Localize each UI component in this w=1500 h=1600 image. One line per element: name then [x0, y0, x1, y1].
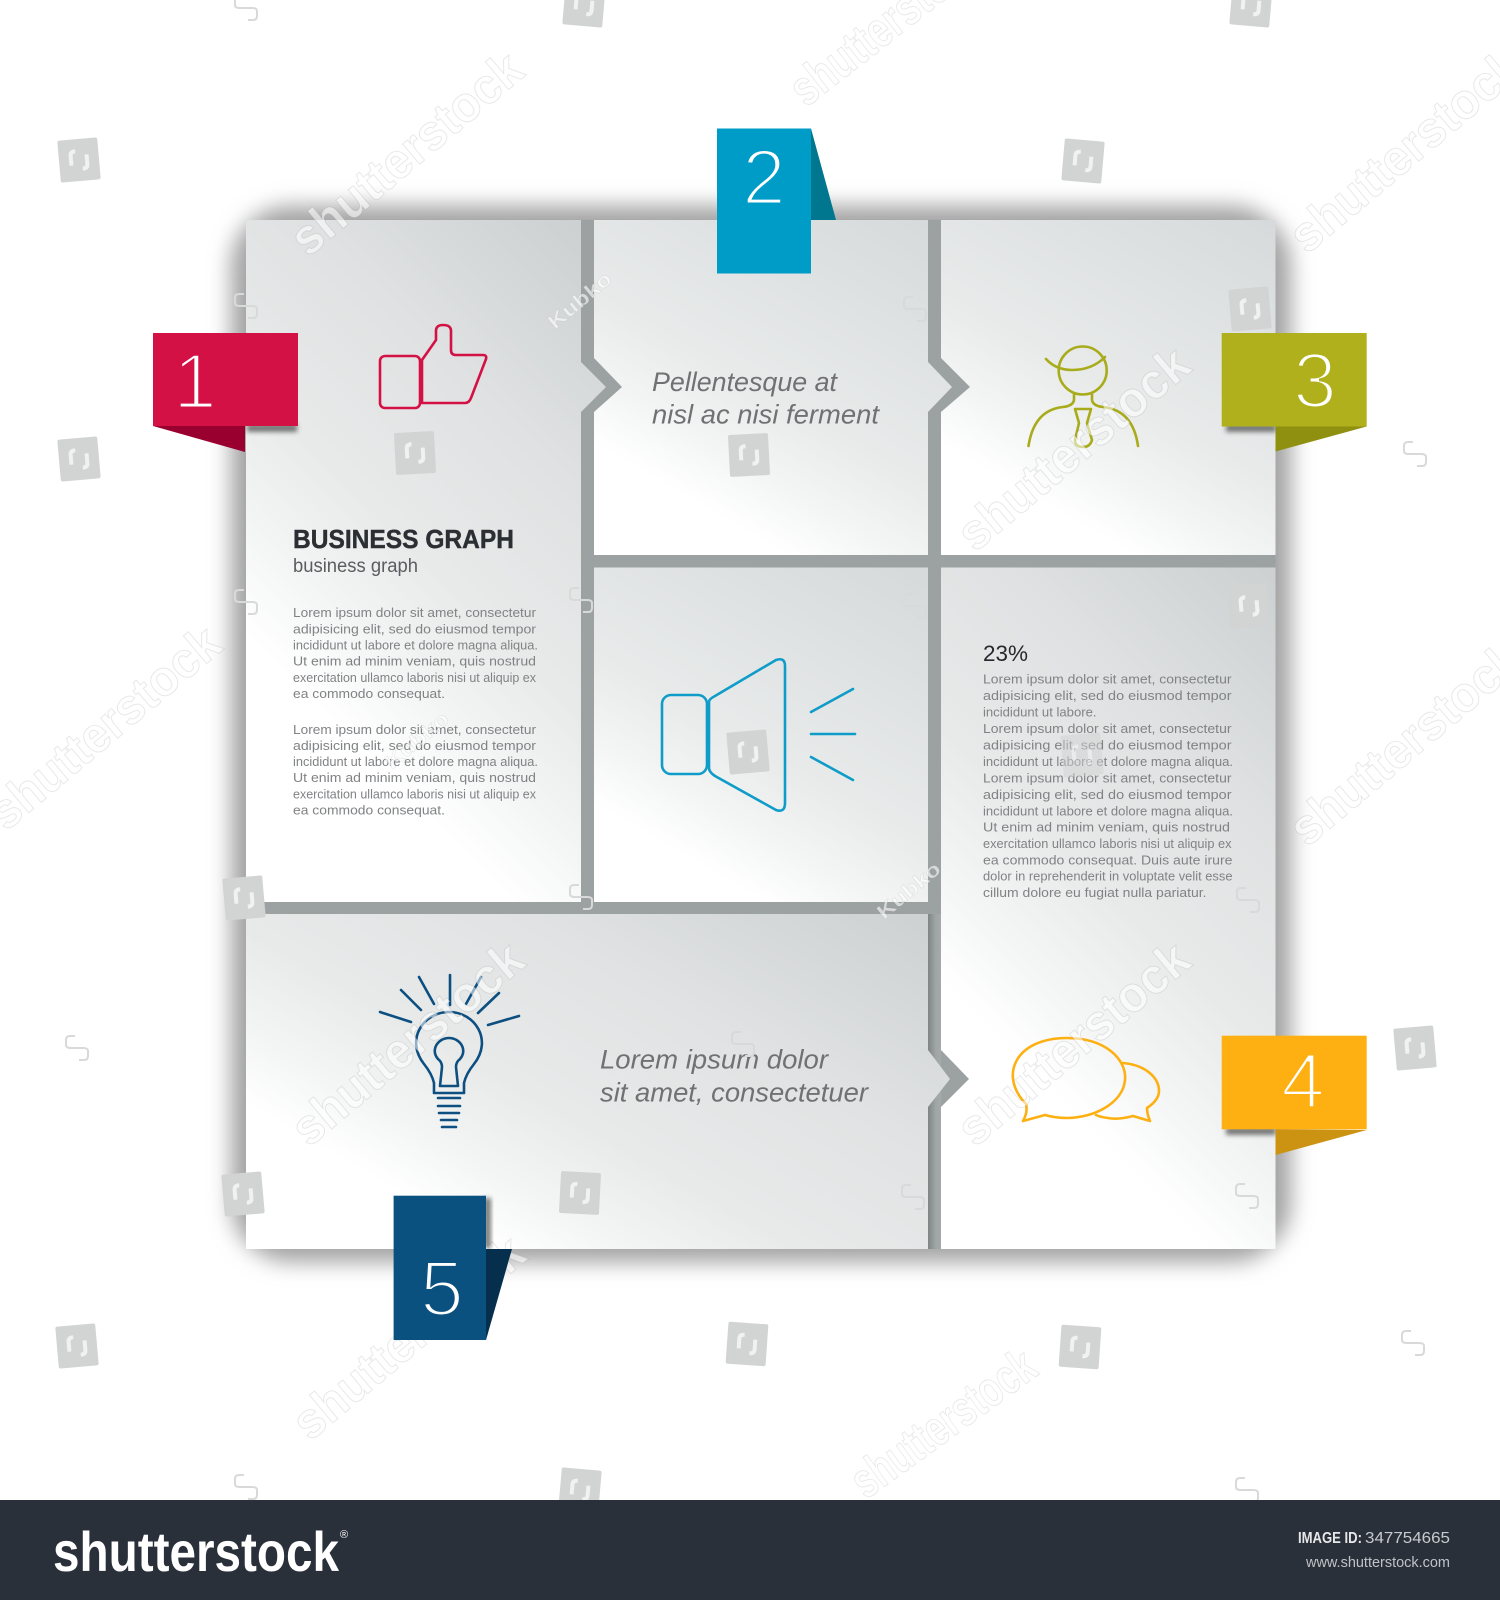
tag 2: blue ribbon: 2 — [742, 133, 786, 221]
panel: right column with 23 percent — [941, 568, 1276, 1249]
text block: right column body: dolor in reprehenderit in voluptate velit esse — [983, 869, 1232, 884]
text block: first paragraph: exercitation ullamco laboris nisi ut aliquip ex — [293, 670, 536, 685]
text block: first paragraph: incididunt ut labore et dolore magna aliqua. — [293, 638, 538, 652]
text block: second paragraph: ea commodo consequat. — [293, 802, 445, 818]
watermark: diagonal stock marks: shutterstock — [946, 335, 1201, 561]
text block: right column body: cillum dolore eu fugiat nulla pariatur. — [983, 885, 1206, 900]
text: pellentesque caption: nisl ac nisi ferment — [652, 400, 881, 430]
footer logo wordmark: shutterstock — [53, 1520, 340, 1583]
text block: right column body: incididunt ut labore. — [983, 704, 1096, 719]
text block: right column body: Lorem ipsum dolor sit amet, consectetur — [983, 672, 1232, 686]
icon: speech bubbles — [1013, 1038, 1159, 1121]
tag 4: amber ribbon: 4 — [1281, 1036, 1325, 1124]
footer bar — [0, 1500, 1500, 1600]
panel: bottom wide with bulb — [246, 914, 950, 1249]
gutter shading along the lower right channel — [928, 914, 941, 1249]
text block: second paragraph: incididunt ut labore et dolore magna aliqua. — [293, 754, 538, 769]
text block: second paragraph: exercitation ullamco laboris nisi ut aliquip ex — [293, 786, 536, 802]
watermark: diagonal stock marks: shutterstock — [280, 930, 535, 1156]
tag 3: olive ribbon: 3 — [1293, 336, 1337, 424]
text block: right column body: ea commodo consequat. Duis aute irure — [983, 852, 1232, 867]
text block: right column body: adipisicing elit, sed do eiusmod tempor — [983, 787, 1232, 802]
text block: first paragraph: Ut enim ad minim veniam, quis nostrud — [293, 654, 536, 668]
image id label: IMAGE ID: — [1298, 1530, 1362, 1547]
watermark: diagonal stock marks: shutterstock — [840, 1337, 1047, 1509]
text block: second paragraph: Lorem ipsum dolor sit amet, consectetur — [293, 722, 537, 737]
tag 5: navy ribbon: 5 — [420, 1244, 464, 1332]
text block: second paragraph: Ut enim ad minim veniam, quis nostrud — [293, 770, 536, 785]
text block: right column body: Ut enim ad minim veniam, quis nostrud — [983, 820, 1230, 835]
text: lorem caption: sit amet, consectetuer — [600, 1078, 869, 1108]
tag 1: crimson ribbon — [153, 333, 298, 452]
text block: right column body: incididunt ut labore et dolore magna aliqua. — [983, 754, 1233, 769]
registered mark: ® — [340, 1529, 348, 1541]
text block: right column body: Lorem ipsum dolor sit amet, consectetur — [983, 770, 1232, 785]
tag 5: navy ribbon — [394, 1196, 512, 1340]
text block: second paragraph: adipisicing elit, sed do eiusmod tempor — [293, 738, 537, 753]
text: lorem caption: Lorem ipsum dolor — [600, 1044, 829, 1074]
text block: right column body: adipisicing elit, sed do eiusmod tempor — [983, 738, 1232, 752]
text: pellentesque caption: Pellentesque at — [652, 367, 838, 397]
text block: first paragraph — [293, 605, 538, 701]
text block: first paragraph: Lorem ipsum dolor sit amet, consectetur — [293, 605, 537, 620]
watermark: diagonal stock marks: shutterstock — [279, 40, 534, 266]
text block: right column body: incididunt ut labore et dolore magna aliqua. — [983, 803, 1233, 818]
tag 3: olive ribbon — [1222, 333, 1367, 452]
text block: first paragraph: ea commodo consequat. — [293, 686, 445, 701]
watermark: diagonal stock marks: shutterstock — [946, 930, 1201, 1156]
watermark: diagonal stock marks: Kubko — [381, 708, 453, 774]
icon: thumbs up — [380, 325, 486, 408]
outer drop shadow of the panel block — [231, 206, 1291, 1262]
icon: person with tie — [1028, 346, 1138, 447]
panel: gutter base — [246, 220, 1276, 1249]
text: pellentesque caption — [652, 367, 881, 430]
text block: right column body: adipisicing elit, sed do eiusmod tempor — [983, 688, 1232, 703]
panel: left column with business graph — [246, 220, 606, 902]
text block: right column body: Lorem ipsum dolor sit amet, consectetur — [983, 721, 1232, 736]
text block: right column body: exercitation ullamco laboris nisi ut aliquip ex — [983, 836, 1232, 851]
panel: top middle — [594, 220, 952, 555]
icon: speaker — [662, 659, 855, 811]
text block: right column body — [983, 672, 1233, 900]
subheading: business graph — [293, 556, 418, 577]
text block: second paragraph — [293, 722, 538, 818]
watermark: diagonal stock marks: Kubko — [873, 858, 945, 924]
website url: www.shutterstock.com — [1305, 1554, 1450, 1571]
panel: speaker centre — [594, 568, 928, 902]
stat: 23%: 23% — [983, 641, 1028, 666]
text: lorem caption — [600, 1044, 869, 1108]
text block: first paragraph: adipisicing elit, sed do eiusmod tempor — [293, 622, 537, 636]
icon: light bulb — [380, 975, 519, 1127]
image id number: 347754665 — [1365, 1530, 1450, 1547]
tag 2: blue ribbon — [717, 128, 836, 274]
watermark: diagonal stock marks: Kubko — [544, 268, 616, 334]
tag 4: amber ribbon — [1222, 1036, 1367, 1155]
watermark: diagonal stock marks: shutterstock — [281, 1224, 536, 1450]
panel: top right — [941, 220, 1276, 555]
heading: business graph: BUSINESS GRAPH — [293, 526, 514, 554]
tag 1: crimson ribbon: 1 — [173, 337, 217, 425]
